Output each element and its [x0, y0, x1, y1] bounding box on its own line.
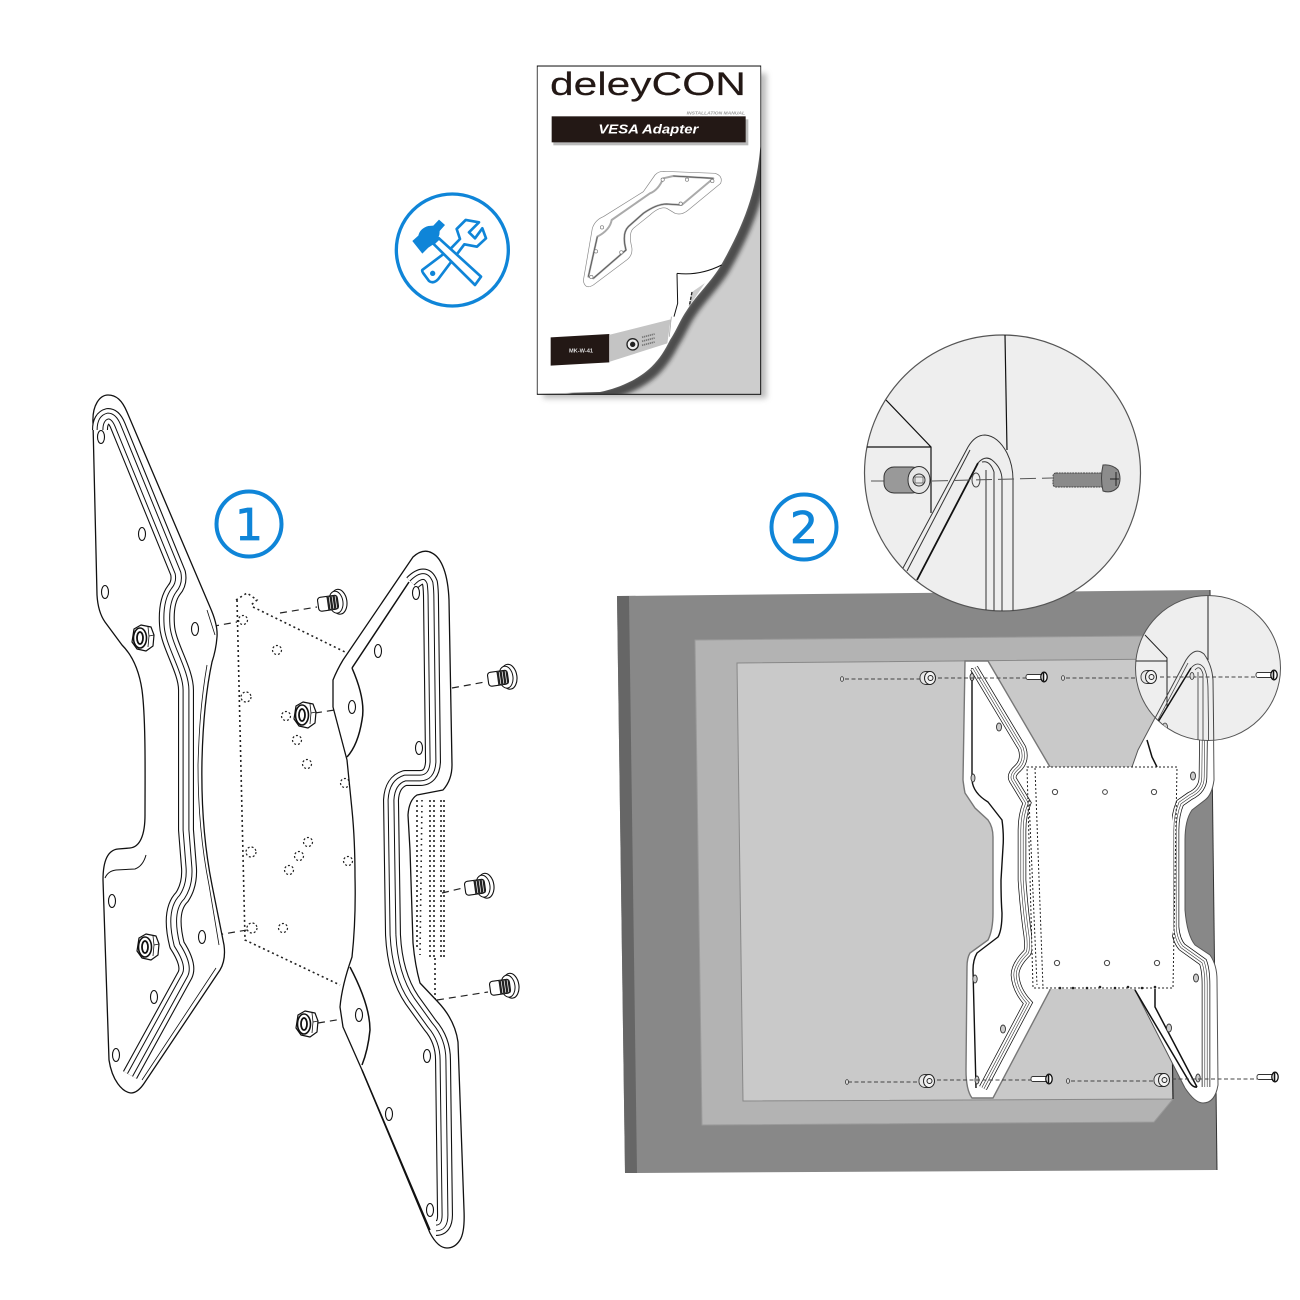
right plate holes [348, 586, 434, 1216]
plate hole [972, 473, 980, 487]
manual booklet [537, 66, 767, 398]
TV back panel [617, 590, 1217, 1173]
curl shadow [570, 149, 764, 397]
step 2 TV assembly [617, 590, 1278, 1173]
TV edge lines [866, 335, 1007, 513]
icon: wrench [422, 220, 486, 282]
large magnifier circle [864, 335, 1140, 615]
nuts [132, 625, 318, 1037]
dotted mount pattern [236, 593, 444, 1000]
small TV holes [840, 676, 1070, 1084]
model code block [551, 334, 609, 366]
left TV plate [963, 661, 1050, 1098]
TV spacers [919, 672, 1170, 1088]
spacer [884, 466, 930, 494]
step 2 badge [772, 494, 836, 560]
title bar [552, 116, 748, 145]
icon: tools badge [396, 194, 508, 306]
bolts [316, 588, 521, 1001]
adapter plate illustration [583, 171, 721, 287]
right adapter plate [333, 551, 464, 1248]
icon: hammer head [412, 220, 445, 254]
model code block: MK-W-41 [569, 349, 593, 355]
step 1 badge [216, 492, 282, 556]
TV inner panel [737, 659, 1173, 1101]
left plate rib [100, 416, 189, 1075]
folded flap [669, 265, 722, 337]
step 1 exploded diagram [93, 395, 521, 1248]
page background with grey corner [537, 66, 761, 394]
TV middle layer [695, 636, 1173, 1125]
booklet shadow [543, 73, 767, 398]
dashed axis [871, 478, 1052, 481]
white page [538, 67, 760, 394]
left plate holes [98, 430, 206, 1062]
step 1 badge: 1 [235, 500, 263, 551]
TV left side edge [617, 596, 637, 1173]
centre mount plate [1027, 767, 1177, 989]
step 2 badge: 2 [790, 503, 818, 554]
icon: handle hole [430, 271, 435, 276]
manual label: INSTALLATION MANUAL [687, 110, 745, 115]
right TV plate [1132, 649, 1218, 1103]
title bar: VESA Adapter [598, 122, 700, 136]
small magnifier circle [1135, 595, 1281, 741]
right plate rib [391, 576, 445, 1228]
logo: deleyCON [550, 66, 746, 102]
screw [1053, 465, 1120, 492]
TV screw dashed lines [845, 678, 1258, 1082]
TV screws [1026, 672, 1278, 1084]
TV plate holes [970, 674, 1200, 1084]
icon: hammer handle [433, 238, 481, 285]
assembly dashed lines [153, 607, 488, 1023]
grey band with seal [610, 319, 671, 362]
left adapter plate [93, 395, 224, 1093]
plate outline [903, 435, 1013, 615]
